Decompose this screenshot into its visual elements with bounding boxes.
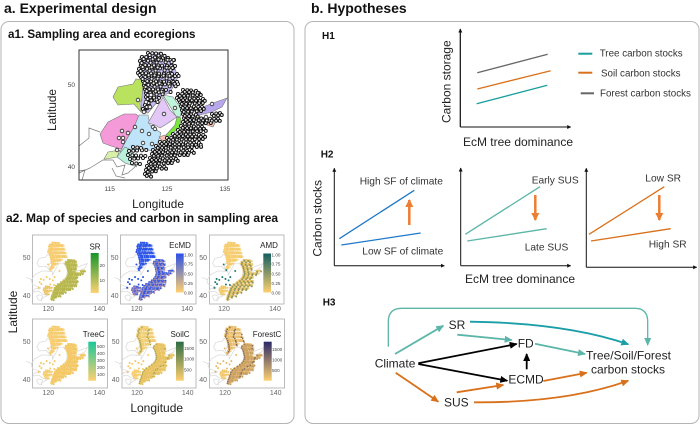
small map: AMD: AMD [260,241,278,250]
small map: EcMD: 0.00 [184,290,193,296]
small map: TreeC: 120 [42,390,54,397]
H3 node labels: SR [449,318,466,332]
H1 legend: Soil carbon stocks [601,68,681,80]
province outlines [79,128,135,180]
H2 chart: SF of climate [334,168,444,266]
small map: SoilC: 120 [131,390,143,397]
small map: TreeC: 140 [93,390,105,397]
small map: EcMD: 120 [131,306,143,313]
small map: SoilC [112,319,196,397]
small map: SoilC: 1500 [184,346,195,351]
H2 chart: SR: Low SR [645,174,681,185]
hypothesis H2 [311,150,697,286]
hypothesis H2: H2 [321,150,334,161]
H3 node labels [375,318,672,409]
small map: AMD: 120 [218,306,230,313]
region: lime grassland [113,79,146,112]
map axis ticks: 135 [220,186,231,193]
small map: AMD: 0.75 [272,262,281,266]
small map: ForestC: ForestC [253,330,281,339]
small map: EcMD: 50 [111,255,119,262]
heading: b. Hypotheses: b. Hypotheses [311,0,407,16]
H2 chart: SF of climate: Low SF of climate [362,246,444,257]
small map: AMD: 140 [269,306,281,313]
region: salmon [159,135,168,142]
small map: AMD: 1.00 [272,252,281,258]
small map: AMD: 50 [199,255,207,262]
small map: EcMD: 1.00 [184,252,193,258]
small map: ForestC [199,319,284,397]
small map: AMD: 40 [199,293,207,300]
small map: TreeC: 100 [97,372,105,377]
small map: SoilC: SoilC [170,330,190,339]
H2 chart: SUS [461,168,579,266]
hypothesis H3 path diagram: H3 [323,298,336,309]
region: lilac centre [148,97,177,128]
small map: ForestC: 140 [270,390,282,397]
small map: AMD: 0.00 [272,290,281,296]
small map: EcMD: EcMD [169,241,191,250]
small map: TreeC: 200 [97,365,105,370]
hypothesis H1: EcM tree dominance [463,135,573,149]
small map: TreeC: 400 [97,351,105,356]
small map: AMD: 0.50 [272,272,281,276]
axis label: small maps latitude: Latitude [6,290,20,333]
H2 chart: SF of climate: High SF of climate [360,176,443,187]
region: bright green [166,117,181,137]
hypothesis H1: Carbon storage [440,40,454,123]
black arrows [418,344,527,381]
small map: TreeC: 50 [23,339,31,346]
small map: SoilC: 50 [112,339,120,346]
small map: SR: SR [89,242,101,252]
region: purple north-east [197,98,227,115]
H2 chart: SUS: Early SUS [532,175,579,186]
hypothesis H2: EcM tree dominance [465,272,575,286]
small map: SoilC: 1000 [184,356,195,362]
small map: SoilC: 140 [182,390,194,397]
sample points [128,53,223,177]
small map: SR [23,235,108,313]
H1 legend: Forest carbon stocks [600,88,691,100]
H3 node labels: Climate [375,357,416,371]
H3 node labels: SUS [444,395,469,409]
H2 chart: SUS: Late SUS [525,242,569,253]
panel: experimental design [1,22,294,424]
small map: SR: 120 [42,306,54,313]
map: sampling area and ecoregions [45,50,231,211]
small map: TreeC [23,319,108,397]
map axis ticks: 50 [68,82,75,89]
H3 node labels: ECMD [508,373,544,387]
axis label: latitude: Latitude [45,89,59,131]
region: salmon east [207,122,215,127]
region: pink steppe [100,114,139,149]
small map: EcMD: 0.50 [184,272,193,276]
hypothesis H3 path diagram [323,298,672,409]
H1 axes [460,29,571,127]
hypothesis H1: H1 [322,31,335,42]
region: pale green [104,150,120,159]
panel: hypotheses [305,22,699,424]
region: periwinkle north [138,52,178,113]
heading: a1 sampling area: a1. Sampling area and ecoregions [8,28,196,41]
small map: ForestC: 1000 [272,358,283,362]
arrow: climate loop to carbon stocks [388,308,648,347]
heading: a2 map of species and carbon: a2. Map of species and carbon in sampling area [6,211,278,225]
map axis ticks [68,82,231,193]
small map: ForestC: 500 [272,368,280,373]
small map: TreeC: 500 [97,344,105,349]
H1 legend [578,48,691,100]
H3 node labels: Tree/Soil/Forest [586,349,672,363]
H1 lines [477,54,551,104]
map axis ticks: 125 [162,186,173,193]
map axis ticks: 40 [68,164,75,171]
small map: TreeC: 40 [23,377,31,384]
region: light blue [120,115,161,153]
small map: SoilC: 40 [112,377,120,384]
axis label: longitude: Longitude [132,197,184,211]
small map: SR: 50 [23,255,31,262]
small map: SR: 40 [23,293,31,300]
map axis ticks: 115 [105,186,115,193]
region: mint lower [117,147,137,167]
heading: a. Experimental design: a. Experimental design [4,0,156,16]
small map: AMD [199,235,284,313]
H1 legend: Tree carbon stocks [600,48,683,60]
H3 node labels: carbon stocks [591,363,665,377]
H2 chart: SR: High SR [649,240,687,251]
small map: SR: 140 [93,306,105,313]
small map: SoilC: 500 [184,368,192,372]
orange arrows [396,373,628,402]
small map: AMD: 0.25 [272,281,281,286]
axis label: small maps longitude: Longitude [130,401,183,415]
small map: ForestC: 1500 [272,347,283,352]
region: mint centre [163,95,182,117]
small map: EcMD [111,235,196,313]
small map: EcMD: 140 [181,306,193,313]
small map: TreeC: TreeC [83,330,105,339]
small map: ForestC: 40 [199,377,207,384]
small map: SR: 10 [100,278,105,284]
small map: SR: 20 [100,263,105,269]
region: pink south [152,153,160,160]
small map: EcMD: 0.75 [184,262,193,266]
small map: TreeC: 300 [97,358,105,363]
hypothesis H2: Carbon stocks [311,180,325,257]
hypothesis H1 [322,29,691,149]
small map: ForestC: 120 [219,390,231,397]
H2 chart: SR [586,168,697,267]
scattered sample points [115,93,214,152]
small map: EcMD: 0.25 [184,281,193,286]
teal arrows [395,322,628,354]
small map: ForestC: 50 [199,339,207,346]
small map: EcMD: 40 [111,293,119,300]
H3 node labels: FD [518,337,534,351]
